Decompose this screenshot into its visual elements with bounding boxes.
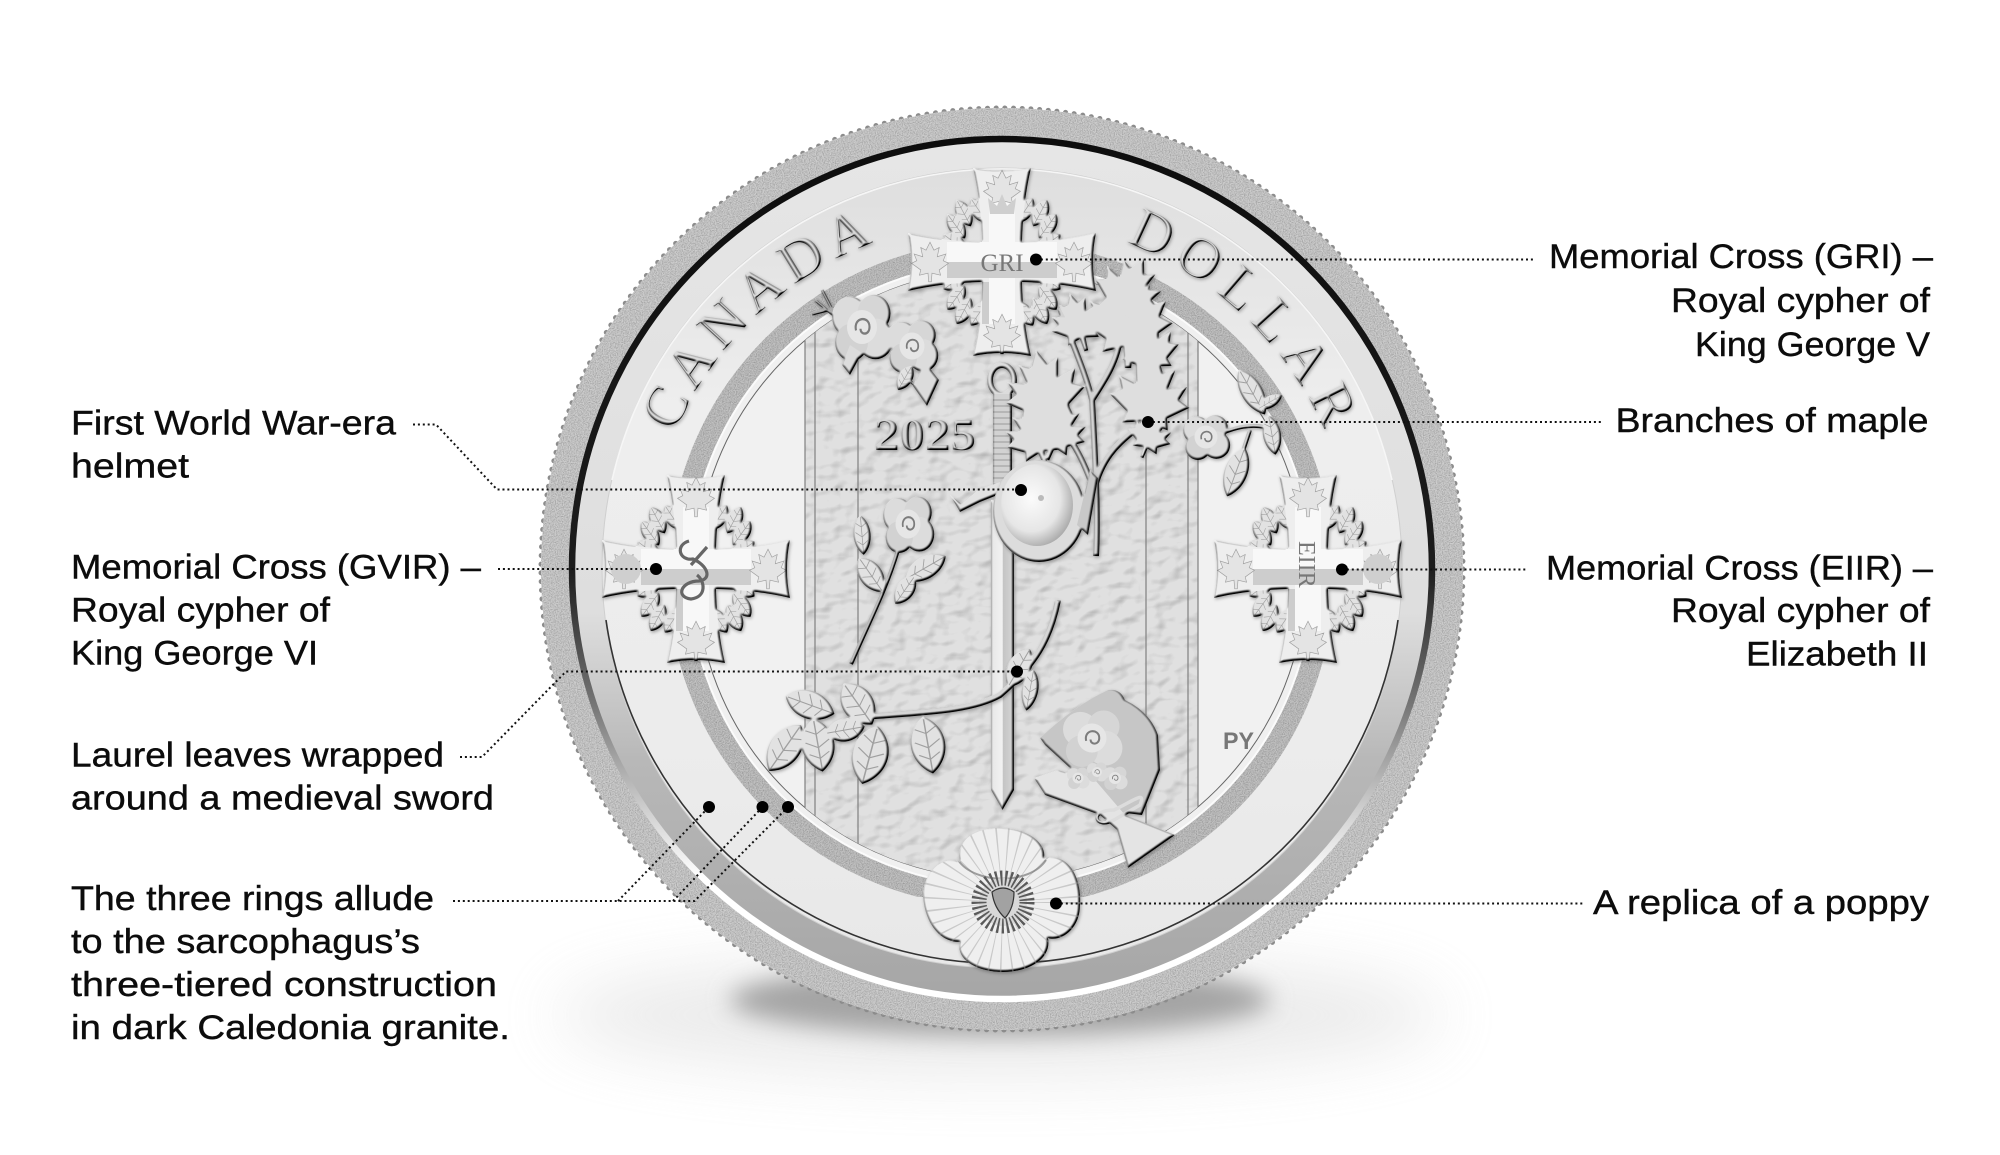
textured tomb panel xyxy=(805,260,1198,900)
label: Memorial Cross GRI: Royal cypher of xyxy=(1671,282,1931,320)
left memorial cross GVIR xyxy=(602,475,790,663)
label: Laurel leaves: Laurel leaves wrapped xyxy=(71,736,444,774)
label: Memorial Cross GRI: Memorial Cross (GRI) – xyxy=(1549,238,1933,276)
label: Laurel leaves xyxy=(71,736,494,818)
label: First World War-era helmet: helmet xyxy=(71,448,190,486)
poppy xyxy=(923,828,1080,972)
label: Memorial Cross GVIR: Royal cypher of xyxy=(71,592,331,630)
label: Memorial Cross GVIR: King George VI xyxy=(71,634,318,672)
inscription: CANADA DOLLAR xyxy=(646,208,1355,432)
outer rim xyxy=(541,108,1463,1030)
label: three rings xyxy=(71,880,510,1047)
inscription: CANADA DOLLAR: DOLLAR xyxy=(1127,208,1355,432)
label: Memorial Cross GRI: King George V xyxy=(1695,326,1930,364)
label: Memorial Cross EIIR: Memorial Cross (EIIR) – xyxy=(1546,550,1933,588)
label: Memorial Cross GVIR: Memorial Cross (GVIR) – xyxy=(71,548,481,586)
leader: Memorial Cross EIIR xyxy=(1336,564,1528,576)
label: three rings: three-tiered construction xyxy=(71,966,497,1004)
leader lines and dots xyxy=(413,254,1602,910)
top memorial cross GRI: GRI xyxy=(980,250,1024,277)
date 2025: 2025 xyxy=(874,409,976,460)
label: three rings: to the sarcophagus’s xyxy=(71,923,420,961)
label: Memorial Cross EIIR xyxy=(1546,550,1933,674)
label: First World War-era helmet: First World War-era xyxy=(71,404,396,442)
laurel branch xyxy=(756,600,1058,789)
reeded coin edge xyxy=(541,108,1463,1030)
label: Laurel leaves: around a medieval sword xyxy=(71,780,494,818)
raised ring xyxy=(571,138,1433,1000)
ground shadow xyxy=(555,955,1445,1075)
wrapped bouquet xyxy=(1034,690,1175,868)
maple branches xyxy=(995,243,1198,556)
sword xyxy=(950,365,1014,810)
right memorial cross EIIR: EIIR xyxy=(1293,541,1319,588)
flowers upper left xyxy=(812,290,939,406)
label: Branches of maple: Branches of maple xyxy=(1616,402,1928,440)
label: poppy: A replica of a poppy xyxy=(1593,884,1929,922)
label: First World War-era helmet xyxy=(71,404,396,486)
leader: Memorial Cross GRI xyxy=(1030,254,1535,266)
rose with stem xyxy=(849,496,951,664)
dark and bright rim groove xyxy=(572,139,1432,999)
right memorial cross EIIR xyxy=(1214,475,1402,663)
leader: three rings xyxy=(453,801,794,901)
label: Memorial Cross EIIR: Elizabeth II xyxy=(1746,636,1928,674)
leader: Branches of maple xyxy=(1142,416,1602,428)
label: Memorial Cross GVIR xyxy=(71,548,481,672)
inscribed band xyxy=(678,251,1324,897)
label: Memorial Cross GRI xyxy=(1549,238,1933,364)
label: three rings: in dark Caledonia granite. xyxy=(71,1009,510,1047)
leader: poppy xyxy=(1050,898,1584,910)
main field xyxy=(602,168,1402,968)
coin xyxy=(538,106,1466,1032)
leader: First World War-era helmet xyxy=(413,424,1027,496)
artist initials PY: PY xyxy=(1223,728,1254,755)
inscription: CANADA DOLLAR: CANADA xyxy=(646,214,875,428)
leader: Laurel leaves xyxy=(460,666,1023,757)
inner field xyxy=(689,262,1313,886)
label: three rings: The three rings allude xyxy=(71,880,434,918)
upper right rose and leaves xyxy=(1183,364,1285,500)
top memorial cross GRI xyxy=(908,168,1096,356)
label: Memorial Cross EIIR: Royal cypher of xyxy=(1671,592,1931,630)
helmet xyxy=(993,460,1098,562)
leader: Memorial Cross GVIR xyxy=(498,563,662,575)
